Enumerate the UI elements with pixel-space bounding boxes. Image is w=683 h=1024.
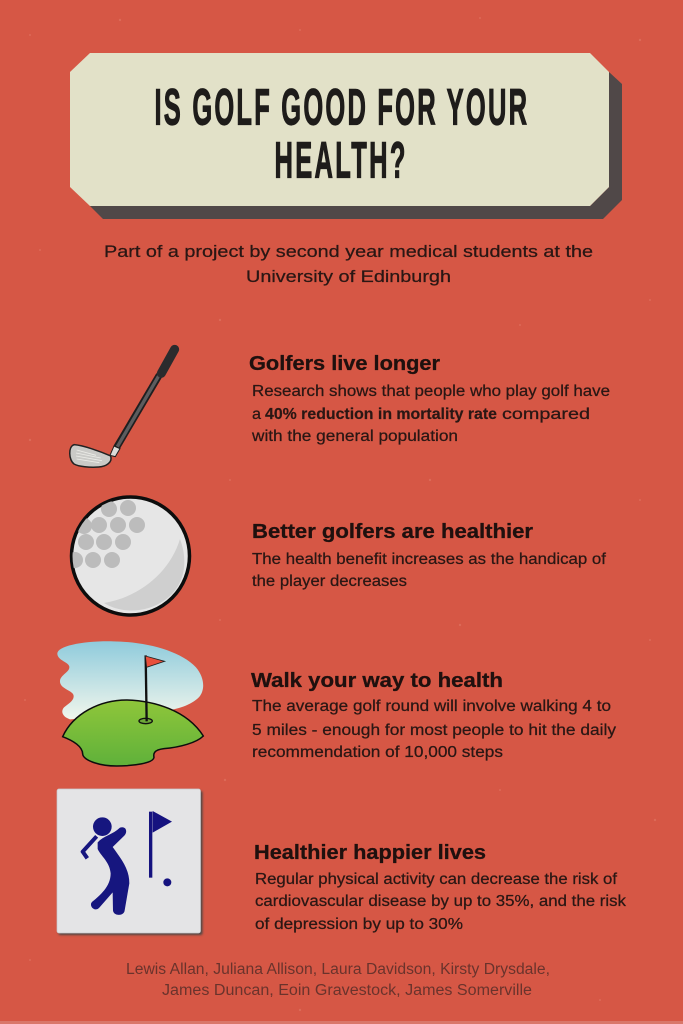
- golfer and flag: [83, 811, 172, 915]
- text: golfers live longer: Research shows that people who play golf have: [252, 383, 610, 400]
- text: golfers live longer: a: [252, 406, 261, 423]
- icon: golf club: [70, 349, 175, 467]
- text: golfers live longer: [251, 383, 610, 445]
- club head: [70, 445, 111, 467]
- text: healthier happier lives: cardiovascular disease by up to 35%, and the risk: [255, 893, 626, 910]
- text: healthier happier lives: [255, 871, 626, 933]
- flag: [153, 811, 172, 833]
- flag pole: [149, 812, 152, 878]
- flag pole: [142, 655, 150, 721]
- heading: golfers live longer: Golfers live longer: [249, 353, 440, 375]
- ball: [163, 878, 171, 886]
- text: walk your way: recommendation of 10,000 steps: [252, 744, 503, 761]
- grip: [161, 349, 175, 373]
- dimples: [67, 500, 145, 568]
- green: [63, 700, 203, 766]
- title banner: [70, 53, 622, 219]
- heading: healthier happier lives: Healthier happier lives: [254, 842, 486, 864]
- title: [154, 79, 527, 189]
- icon: golfer sign: [57, 789, 202, 935]
- text: walk your way: 5 miles - enough for most people to hit the daily: [252, 722, 616, 739]
- text: golfers live longer: with the general population: [251, 428, 458, 445]
- sky: [57, 641, 203, 719]
- title: IS GOLF GOOD FOR YOUR: [154, 79, 527, 136]
- heading: walk your way: Walk your way to health: [251, 670, 503, 692]
- sign plate shadow: [58, 791, 202, 935]
- banner plate: [70, 53, 609, 206]
- credits: [126, 961, 550, 999]
- ball shading: [104, 539, 184, 611]
- hole: [139, 718, 152, 724]
- icon: putting green: [57, 641, 203, 766]
- golfer: [83, 817, 129, 915]
- title: HEALTH?: [274, 132, 406, 189]
- text: walk your way: [252, 698, 616, 761]
- credits: Lewis Allan, Juliana Allison, Laura Davidson, Kirsty Drysdale,: [126, 961, 550, 978]
- text: better golfers: the player decreases: [252, 573, 407, 590]
- shaft: [117, 375, 159, 447]
- subtitle: Part of a project by second year medical students at the: [104, 243, 593, 261]
- icon: golf ball: [67, 497, 190, 615]
- subtitle: University of Edinburgh: [246, 268, 451, 286]
- banner shadow: [90, 72, 622, 219]
- text: golfers live longer: compared: [502, 406, 590, 423]
- text: healthier happier lives: Regular physical activity can decrease the risk of: [255, 871, 618, 888]
- text: better golfers: The health benefit increases as the handicap of: [252, 551, 607, 568]
- subtitle: [104, 243, 593, 286]
- text: healthier happier lives: of depression by up to 30%: [255, 916, 463, 933]
- sign plate: [57, 789, 200, 933]
- hosel: [110, 446, 120, 457]
- text: golfers live longer: 40% reduction in mortality rate: [265, 406, 497, 423]
- text: walk your way: The average golf round will involve walking 4 to: [252, 698, 611, 715]
- flag: [145, 656, 165, 667]
- text: better golfers: [252, 551, 607, 590]
- credits: James Duncan, Eoin Gravestock, James Somerville: [162, 982, 532, 999]
- heading: better golfers: Better golfers are healthier: [252, 521, 533, 543]
